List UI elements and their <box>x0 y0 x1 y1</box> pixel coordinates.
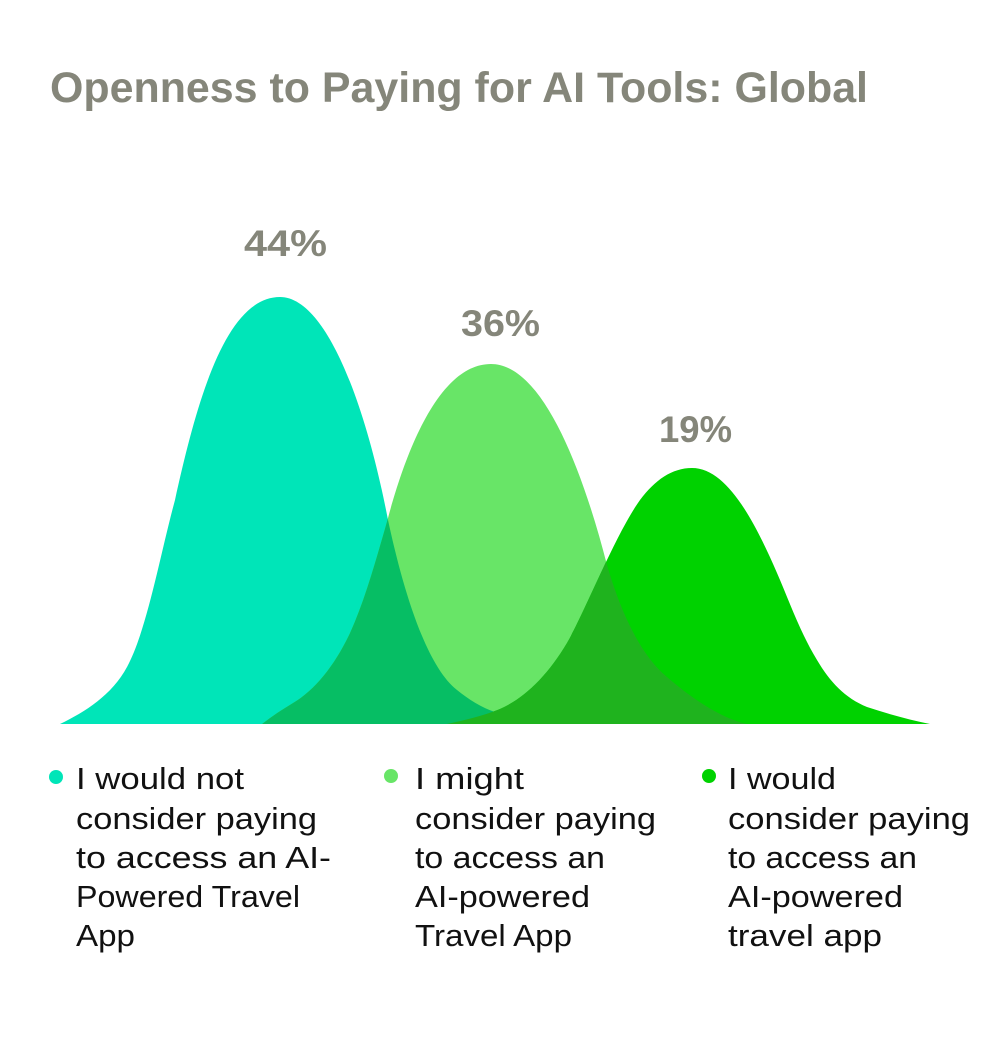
legend item: would not consider paying <box>49 761 331 953</box>
legend item: would consider paying <box>702 761 970 953</box>
legend dot: green <box>702 769 716 783</box>
legend item: would consider paying: to access an <box>728 840 917 875</box>
curve: would not consider paying <box>60 297 550 724</box>
curve: might consider paying <box>262 364 747 724</box>
legend item: might consider paying: consider paying <box>415 801 656 836</box>
legend dot: teal <box>49 770 63 784</box>
legend item: would not consider paying: I would not <box>76 761 244 796</box>
legend item: might consider paying: to access an <box>415 840 605 875</box>
legend item: might consider paying: I might <box>415 761 524 796</box>
legend item: would consider paying: travel app <box>728 918 882 953</box>
legend item: would consider paying: I would <box>728 761 836 796</box>
value label: 44%: 44% <box>244 223 327 264</box>
overlap: first and second curves <box>262 518 494 724</box>
overlap: second and third curves <box>447 562 746 724</box>
value label: 36%: 36% <box>461 303 540 344</box>
legend item: would not consider paying: consider paying <box>76 801 317 836</box>
legend item: would not consider paying: to access an AI- <box>76 840 331 875</box>
legend item: would consider paying: consider paying <box>728 801 970 836</box>
legend item: would not consider paying: App <box>76 918 135 953</box>
legend item: might consider paying <box>384 761 656 953</box>
legend dot: light green <box>384 769 398 783</box>
curve: would consider paying <box>447 468 930 724</box>
chart: overlapping distribution curves <box>60 297 930 724</box>
legend item: would consider paying: AI-powered <box>728 879 903 914</box>
title: Openness to Paying for AI Tools: Global <box>50 64 868 112</box>
value label: 19%: 19% <box>659 409 732 450</box>
legend item: might consider paying: Travel App <box>415 918 572 953</box>
legend item: would not consider paying: Powered Travel <box>76 879 300 914</box>
legend item: might consider paying: AI-powered <box>415 879 590 914</box>
